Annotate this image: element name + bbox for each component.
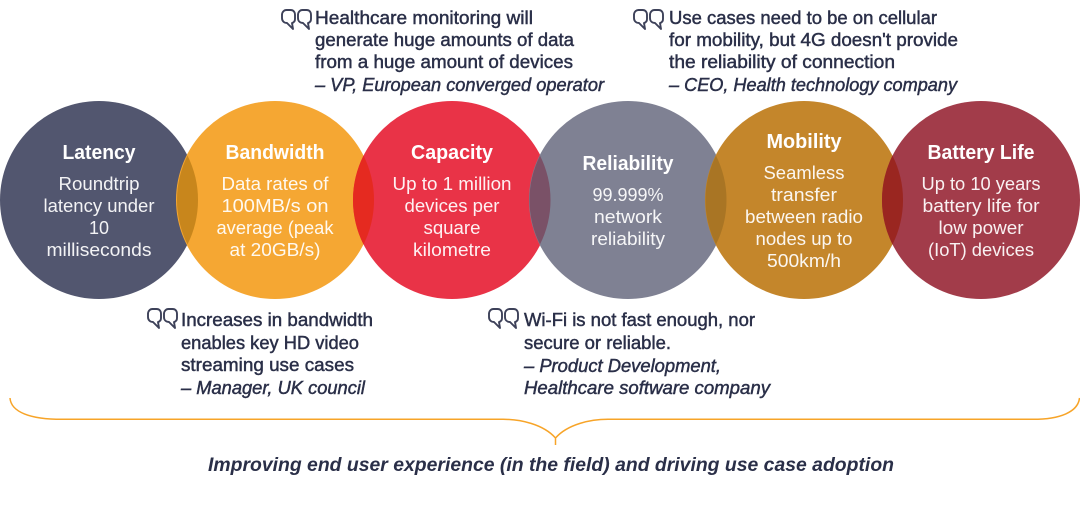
circle: Mobility: 500km/h: [767, 251, 841, 271]
circle: Mobility: between radio: [745, 207, 863, 227]
circle: Battery Life: Battery Life: [928, 142, 1034, 164]
circle: Latency: milliseconds: [46, 240, 152, 260]
icon: quote mark: [489, 309, 518, 328]
quote: bandwidth video: streaming use cases: [181, 355, 354, 375]
icon: quote mark: [282, 10, 311, 29]
quote: bandwidth video: [148, 309, 373, 398]
quote: bandwidth video: – Manager, UK council: [180, 378, 366, 398]
circle: Battery Life: (IoT) devices: [928, 240, 1034, 260]
circle: Bandwidth: [176, 101, 374, 299]
circle: Capacity: square: [424, 218, 480, 238]
circle: Mobility: Mobility: [766, 131, 842, 153]
circle: Capacity: Up to 1 million: [392, 174, 512, 194]
circle: Battery Life: Up to 10 years: [922, 174, 1040, 194]
quote: healthcare monitoring: from a huge amount of devices: [315, 52, 573, 72]
quote: cellular for mobility: [634, 8, 958, 95]
quote: wi-fi: secure or reliable.: [524, 333, 671, 353]
circle: Latency: Latency: [62, 142, 136, 164]
circle: Latency: [0, 101, 198, 299]
circle: Mobility: Seamless: [764, 163, 844, 183]
quote: cellular for mobility: Use cases need to be on cellular: [669, 8, 937, 28]
circle: Latency: Roundtrip: [58, 174, 140, 194]
circle: Reliability: [529, 101, 727, 299]
circle: Bandwidth: average (peak: [216, 218, 335, 238]
quote: wi-fi: – Product Development,: [523, 356, 721, 376]
circle: Mobility: transfer: [771, 185, 837, 205]
circle: Reliability: Reliability: [582, 153, 674, 175]
quote: wi-fi: Healthcare software company: [524, 378, 771, 398]
quote: healthcare monitoring: – VP, European converged operator: [314, 75, 605, 95]
circle: Latency: latency under: [44, 196, 154, 216]
circle: Capacity: devices per: [404, 196, 500, 216]
quote: healthcare monitoring: generate huge amounts of data: [315, 30, 575, 50]
circle: Reliability: reliability: [591, 229, 665, 249]
quote: cellular for mobility: – CEO, Health technology company: [668, 75, 958, 95]
quote: healthcare monitoring: Healthcare monitoring will: [315, 8, 533, 28]
circle: Bandwidth: Bandwidth: [226, 142, 324, 164]
circle: Battery Life: low power: [938, 218, 1024, 238]
brace: [10, 398, 1080, 445]
circle: Latency: 10: [89, 218, 109, 238]
circle: Bandwidth: at 20GB/s): [230, 240, 320, 260]
quote: bandwidth video: enables key HD video: [181, 333, 359, 353]
circle: Mobility: nodes up to: [756, 229, 852, 249]
circle: Reliability: network: [594, 207, 663, 227]
quote: wi-fi: Wi-Fi is not fast enough, nor: [524, 310, 755, 330]
circle: Mobility: [705, 101, 903, 299]
circle: Capacity: [353, 101, 551, 299]
quote: cellular for mobility: for mobility, but 4G doesn't provide: [669, 30, 958, 50]
quote: cellular for mobility: the reliability of connection: [669, 52, 895, 72]
circle: Capacity: kilometre: [413, 240, 491, 260]
circle: Bandwidth: 100MB/s on: [222, 196, 328, 216]
icon: quote mark: [634, 10, 663, 29]
circle: Bandwidth: Data rates of: [222, 174, 330, 194]
quote: bandwidth video: Increases in bandwidth: [181, 310, 373, 330]
quote: healthcare monitoring: [282, 8, 605, 95]
circle: Battery Life: [882, 101, 1080, 299]
circle: Battery Life: battery life for: [922, 196, 1040, 216]
quote: wi-fi: [489, 309, 771, 398]
circle: Reliability: 99.999%: [592, 185, 664, 205]
icon: quote mark: [148, 309, 177, 328]
circle: Capacity: Capacity: [411, 142, 494, 164]
conclusion text: Improving end user experience (in the field) and driving use case adoption: [208, 455, 894, 476]
